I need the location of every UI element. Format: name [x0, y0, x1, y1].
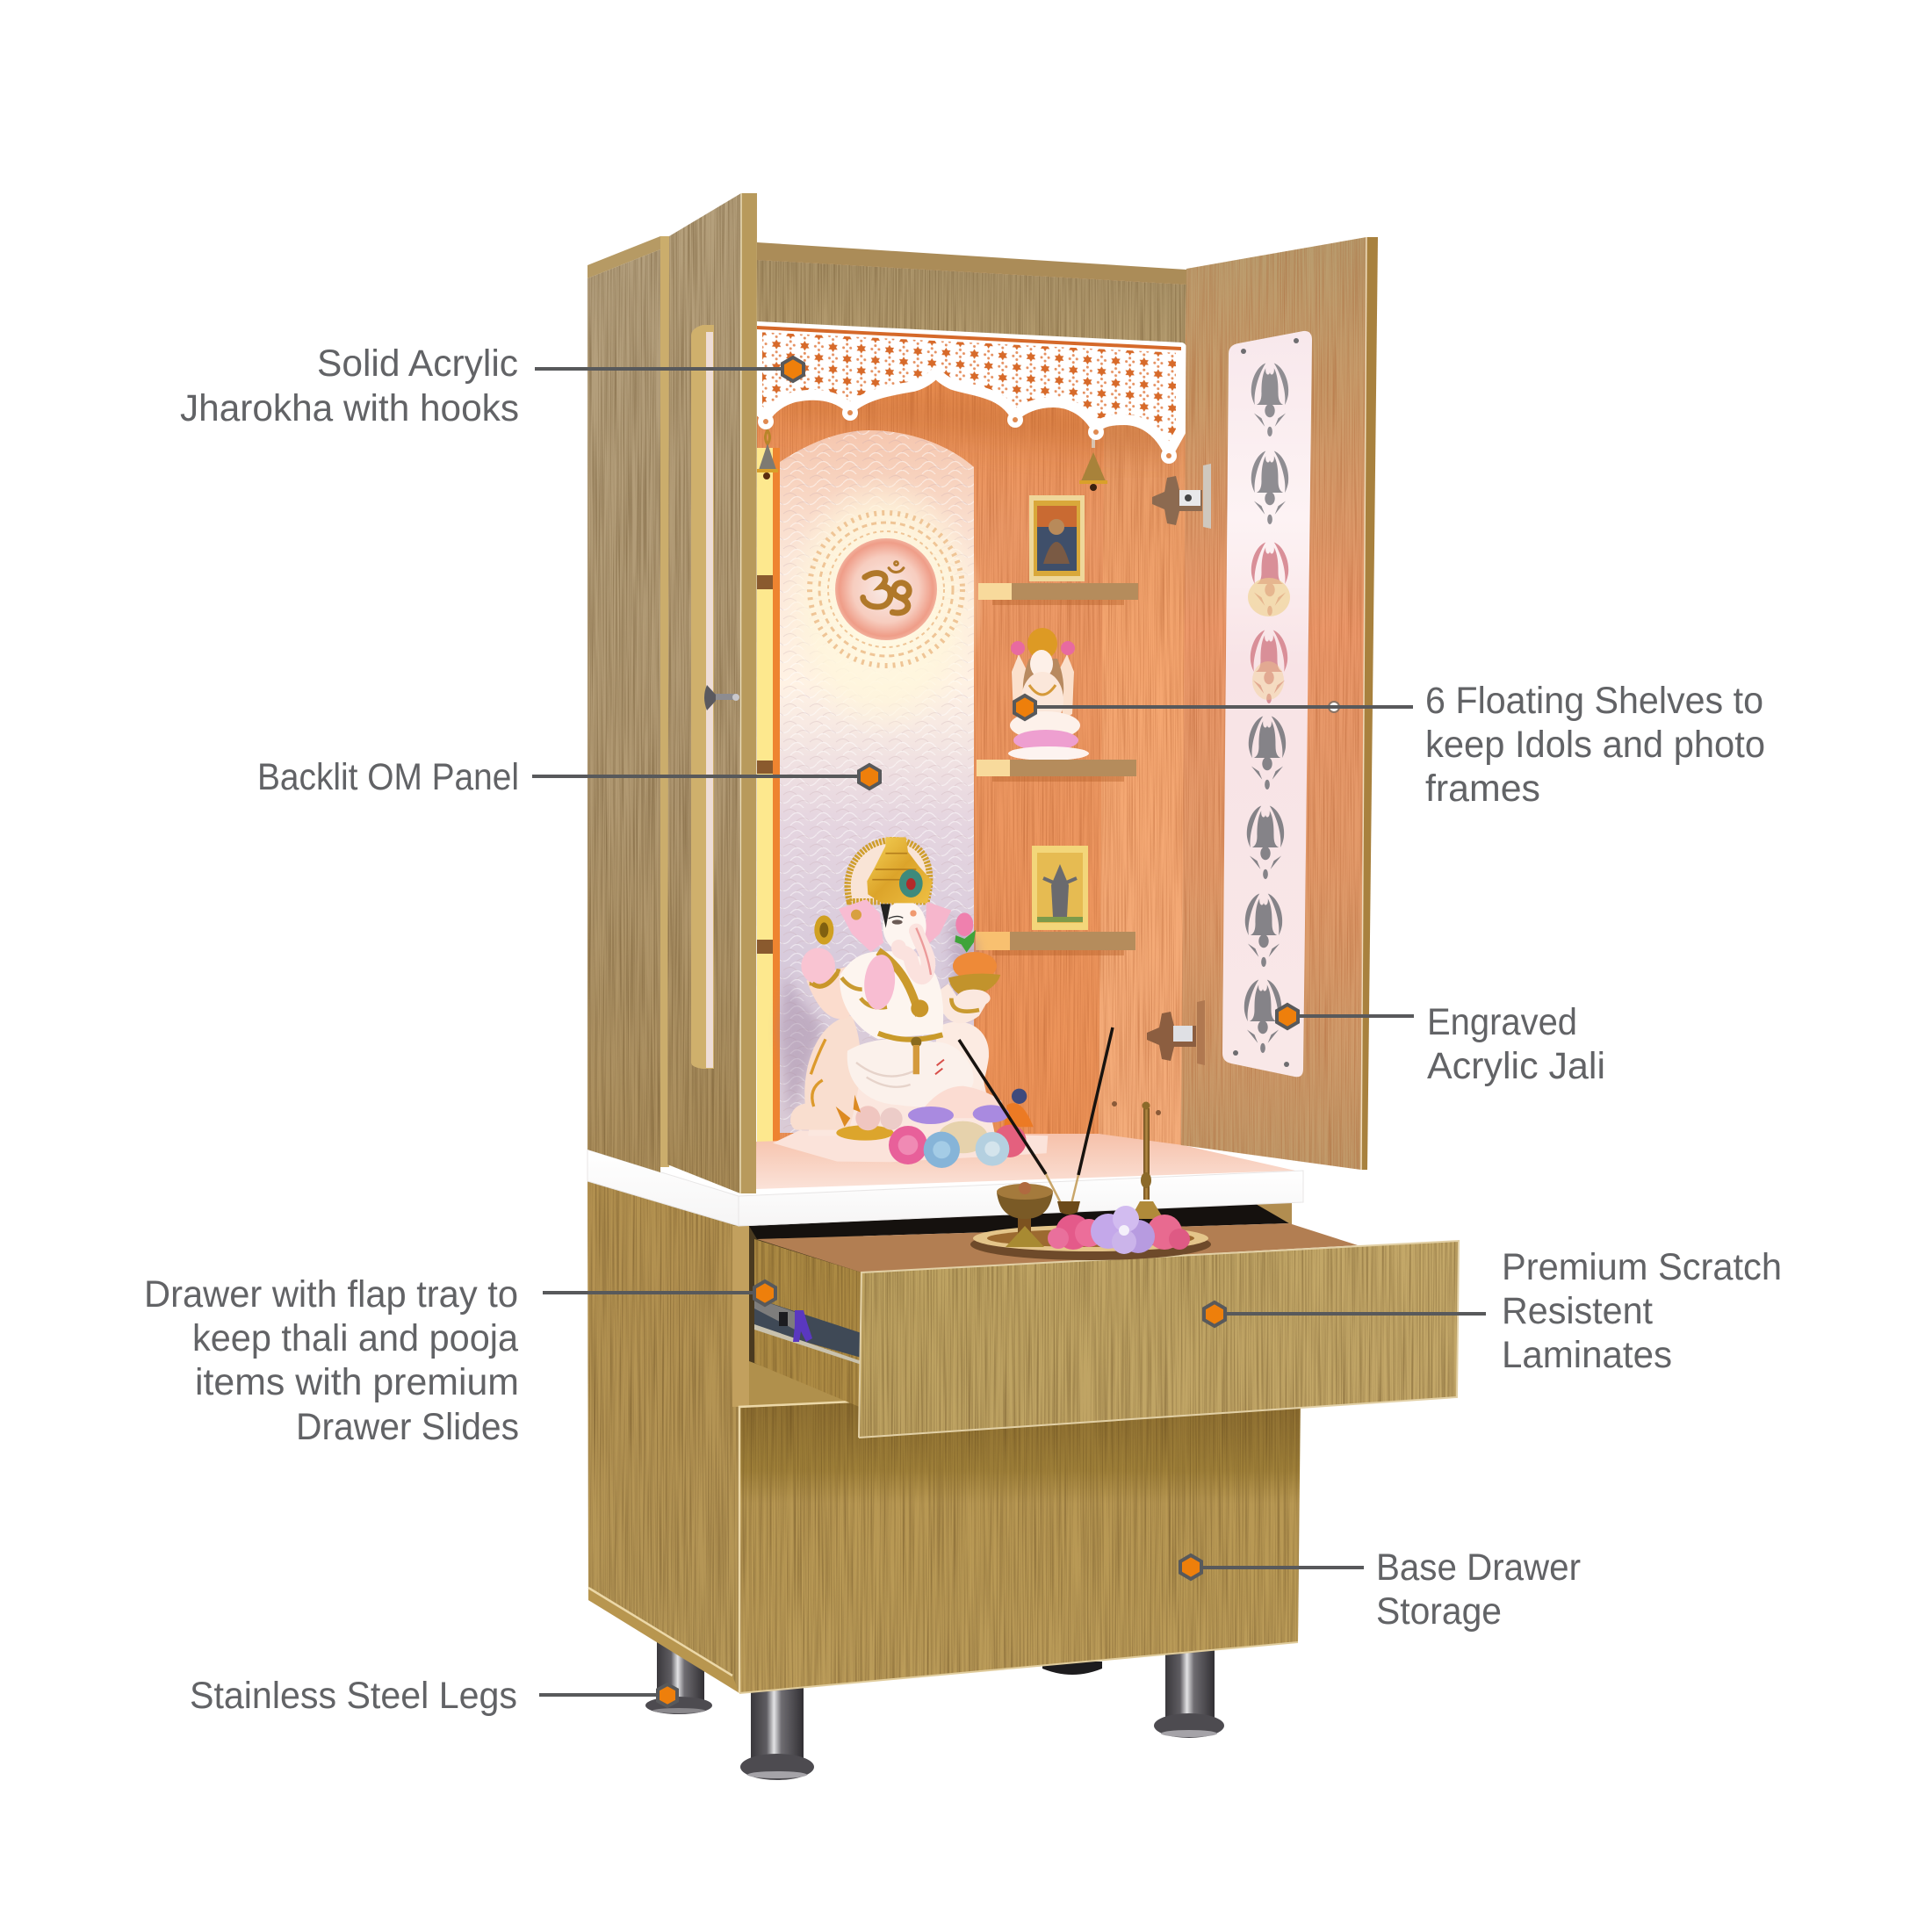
- hex marker: [1277, 1005, 1298, 1028]
- brass bell handle: [1130, 1101, 1164, 1219]
- counter: front white face: [739, 1171, 1303, 1226]
- solid acrylic jharokha: [757, 326, 1181, 464]
- label third line: frames: [1425, 768, 1540, 810]
- label first line: Drawer with flap tray to: [144, 1273, 518, 1316]
- door peg screws: [1112, 1101, 1161, 1115]
- right interior wall: [1099, 334, 1186, 1145]
- Ganesha idol: [773, 837, 1048, 1168]
- callout: 6 Floating Shelves: [1014, 680, 1765, 810]
- lower drawer front: base drawer storage: [739, 1361, 1301, 1693]
- laddu bowl: [953, 952, 997, 980]
- Lakshmi idol on shelf: [1008, 628, 1089, 761]
- hex marker: [658, 1684, 677, 1706]
- label second line: Acrylic Jali: [1427, 1045, 1605, 1087]
- trunk: [898, 931, 928, 977]
- left hand and axe: [801, 948, 835, 984]
- callout: Engraved Acrylic Jali: [1277, 1001, 1605, 1087]
- purple slide clip: [793, 1310, 812, 1342]
- label second line: keep Idols and photo: [1425, 724, 1765, 766]
- leader line: [532, 775, 862, 778]
- hex marker: [1014, 696, 1035, 719]
- halo: [847, 840, 930, 902]
- callout: Backlit OM Panel: [257, 756, 880, 798]
- floor surface: [756, 1134, 1295, 1189]
- hex marker: [782, 357, 804, 381]
- hanging bell left: [757, 430, 778, 479]
- hex marker: [1204, 1302, 1225, 1326]
- belly: [840, 951, 943, 1039]
- LED side strip: [757, 448, 780, 1145]
- shelf one and Shiva photo frame: [978, 495, 1138, 605]
- lower hinge: [1147, 1000, 1205, 1065]
- base side panel: [588, 1181, 749, 1693]
- leader line: [1224, 1312, 1486, 1316]
- hex marker: [859, 765, 880, 789]
- door finger slot: [691, 325, 714, 1069]
- label third line: Laminates: [1502, 1334, 1672, 1376]
- leader line: [1297, 1014, 1414, 1018]
- label first line: Base Drawer: [1376, 1546, 1581, 1589]
- raised palm: [862, 954, 898, 1011]
- label first line: Premium Scratch: [1502, 1246, 1782, 1288]
- label second line: Storage: [1376, 1590, 1502, 1633]
- arms: [806, 966, 867, 1019]
- crown: [867, 837, 933, 903]
- ears: [839, 899, 883, 952]
- label third line: items with premium: [195, 1361, 519, 1403]
- upper hinge: [1152, 464, 1211, 529]
- door peg hole: [1329, 702, 1339, 712]
- mandala rings: [810, 513, 962, 666]
- upper drawer front: [859, 1241, 1459, 1438]
- shadow on wall: [779, 913, 977, 1118]
- label fourth line: Drawer Slides: [296, 1406, 519, 1448]
- leader line: [535, 367, 782, 371]
- leader line: [539, 1693, 659, 1697]
- icon: OM symbol: [863, 561, 909, 613]
- label first line: Solid Acrylic: [317, 342, 518, 385]
- backlit OM panel: [780, 430, 984, 1133]
- leader line: [1035, 705, 1413, 709]
- label first line: 6 Floating Shelves to: [1425, 680, 1763, 722]
- shelf two: [977, 760, 1136, 782]
- leader line: [1201, 1566, 1364, 1569]
- legs: [790, 1016, 861, 1130]
- callout: Stainless Steel Legs: [190, 1675, 677, 1717]
- brass diya: [997, 1182, 1053, 1247]
- side panel left: [588, 236, 669, 1172]
- hanging bell right: [1079, 430, 1107, 491]
- label: Stainless Steel Legs: [190, 1675, 517, 1717]
- mouse: [1012, 1089, 1027, 1104]
- right carcass piece: [1256, 1202, 1292, 1225]
- top panel: [757, 242, 1186, 346]
- drawer cavity backing: [749, 1226, 863, 1407]
- left door: [667, 193, 757, 1193]
- flowers: [925, 1086, 1007, 1118]
- label second line: Resistent: [1502, 1290, 1653, 1332]
- label: Backlit OM Panel: [257, 756, 519, 798]
- dhoti: [847, 1038, 974, 1107]
- necklace: [878, 951, 919, 1016]
- OM disc: [835, 538, 937, 640]
- counter: left white face: [588, 1150, 739, 1226]
- cabinet back wall: [757, 260, 1186, 1145]
- incense sticks: [959, 1027, 1113, 1215]
- label first line: Engraved: [1427, 1001, 1577, 1043]
- leader line: [543, 1291, 755, 1294]
- callout: Premium Scratch Resistent Laminates: [1204, 1246, 1782, 1376]
- shelf three and Kali photo frame: [976, 846, 1135, 955]
- lotus bud: [955, 912, 973, 936]
- label second line: Jharokha with hooks: [180, 387, 519, 429]
- engraved acrylic jali: [1222, 331, 1312, 1077]
- cabinet product illustration: [588, 193, 1459, 1780]
- label second line: keep thali and pooja: [192, 1317, 518, 1359]
- marble base: [773, 1130, 1048, 1162]
- right door: [1112, 237, 1378, 1170]
- soft shadow under jharokha: [773, 386, 1177, 457]
- flowers on thali: [1048, 1206, 1190, 1254]
- upper drawer side and slide: [754, 1239, 861, 1408]
- seat block: [808, 1080, 995, 1135]
- callout: Solid Acrylic Jharokha: [180, 342, 804, 429]
- callout: Base Drawer Storage: [1180, 1546, 1581, 1633]
- fruit plate: [836, 1125, 894, 1141]
- head: [883, 901, 926, 952]
- hex marker: [754, 1281, 775, 1305]
- cavity under counter: [749, 1204, 1289, 1239]
- upper drawer tray: [757, 1223, 1358, 1272]
- thali with brass diya, incense and flowers: [959, 1027, 1211, 1260]
- stainless steel legs: [645, 1633, 1224, 1780]
- callout: Drawer with flap tray: [144, 1273, 775, 1448]
- door knob: [704, 685, 739, 710]
- hex marker: [1180, 1555, 1201, 1579]
